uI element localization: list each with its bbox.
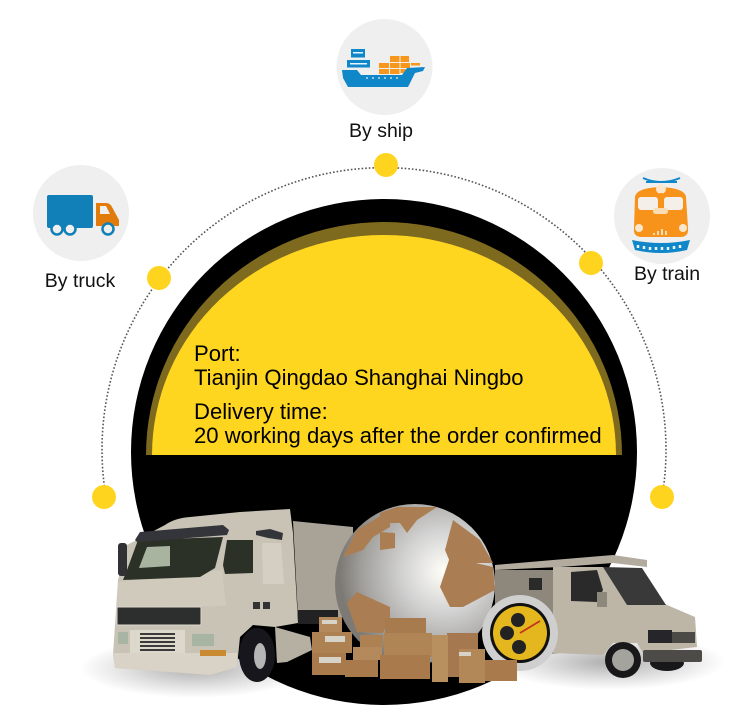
delivery text: [194, 341, 602, 448]
arc node dots: [92, 153, 674, 509]
ground shadow right: [495, 634, 725, 690]
icon: train: [614, 168, 710, 264]
globe illustration: [335, 504, 495, 664]
van illustration: [495, 555, 702, 678]
truck illustration: [113, 509, 353, 682]
stopwatch: [482, 595, 558, 671]
delivery text: 20 working days after the order confirmed: [194, 423, 602, 448]
label: by train: By train: [634, 263, 700, 285]
delivery text: Delivery time:: [194, 399, 328, 424]
boxes: [312, 617, 517, 683]
icon: ship: [336, 19, 432, 115]
label: by truck: By truck: [45, 270, 115, 292]
label: by ship: By ship: [349, 120, 413, 142]
icon: truck: [33, 165, 129, 261]
black circle: [131, 199, 637, 705]
ground shadow left: [80, 638, 310, 698]
yellow dome panel: [146, 222, 622, 455]
delivery text: Tianjin Qingdao Shanghai Ningbo: [194, 365, 524, 390]
dotted arc: [102, 168, 666, 497]
delivery text: Port:: [194, 341, 241, 366]
